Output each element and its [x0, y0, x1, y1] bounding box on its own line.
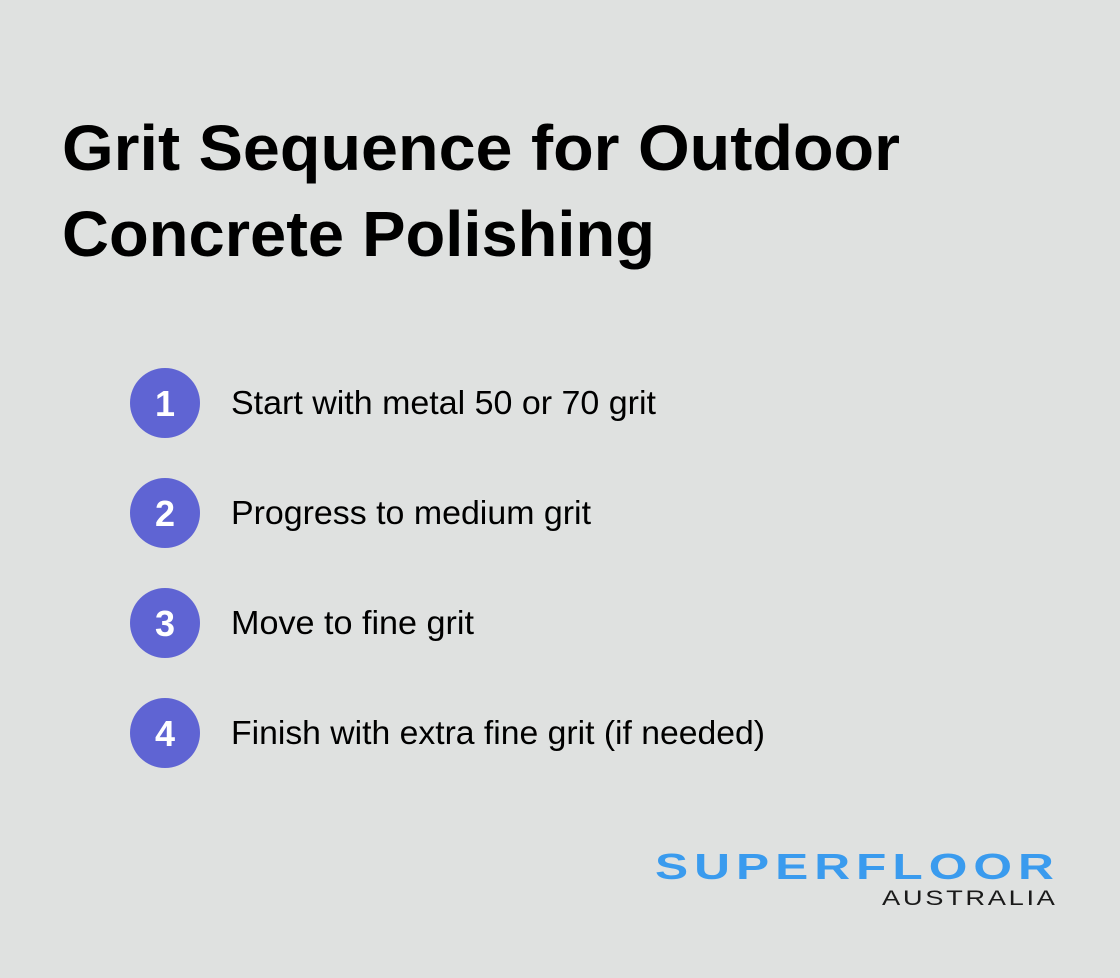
step 4: Finish with extra fine grit (if needed) [231, 714, 765, 751]
logo: Superfloor Australia [655, 847, 1056, 910]
step 2: 2 [155, 493, 175, 534]
step 2 [130, 478, 591, 548]
step 4: 4 [155, 713, 175, 754]
step 3 [130, 588, 474, 658]
title: Grit Sequence for Outdoor [62, 112, 900, 184]
logo: Superfloor Australia: SUPERFLOOR [655, 847, 1054, 887]
title: Concrete Polishing [62, 198, 655, 270]
step 3: Move to fine grit [231, 604, 474, 641]
logo: Superfloor Australia: AUSTRALIA [882, 887, 1056, 910]
title [62, 112, 900, 270]
step 1 [130, 368, 656, 438]
step 3: 3 [155, 603, 175, 644]
step 2: Progress to medium grit [231, 494, 591, 531]
step 4 [130, 698, 765, 768]
step 1: Start with metal 50 or 70 grit [231, 384, 656, 421]
step 1: 1 [155, 383, 175, 424]
